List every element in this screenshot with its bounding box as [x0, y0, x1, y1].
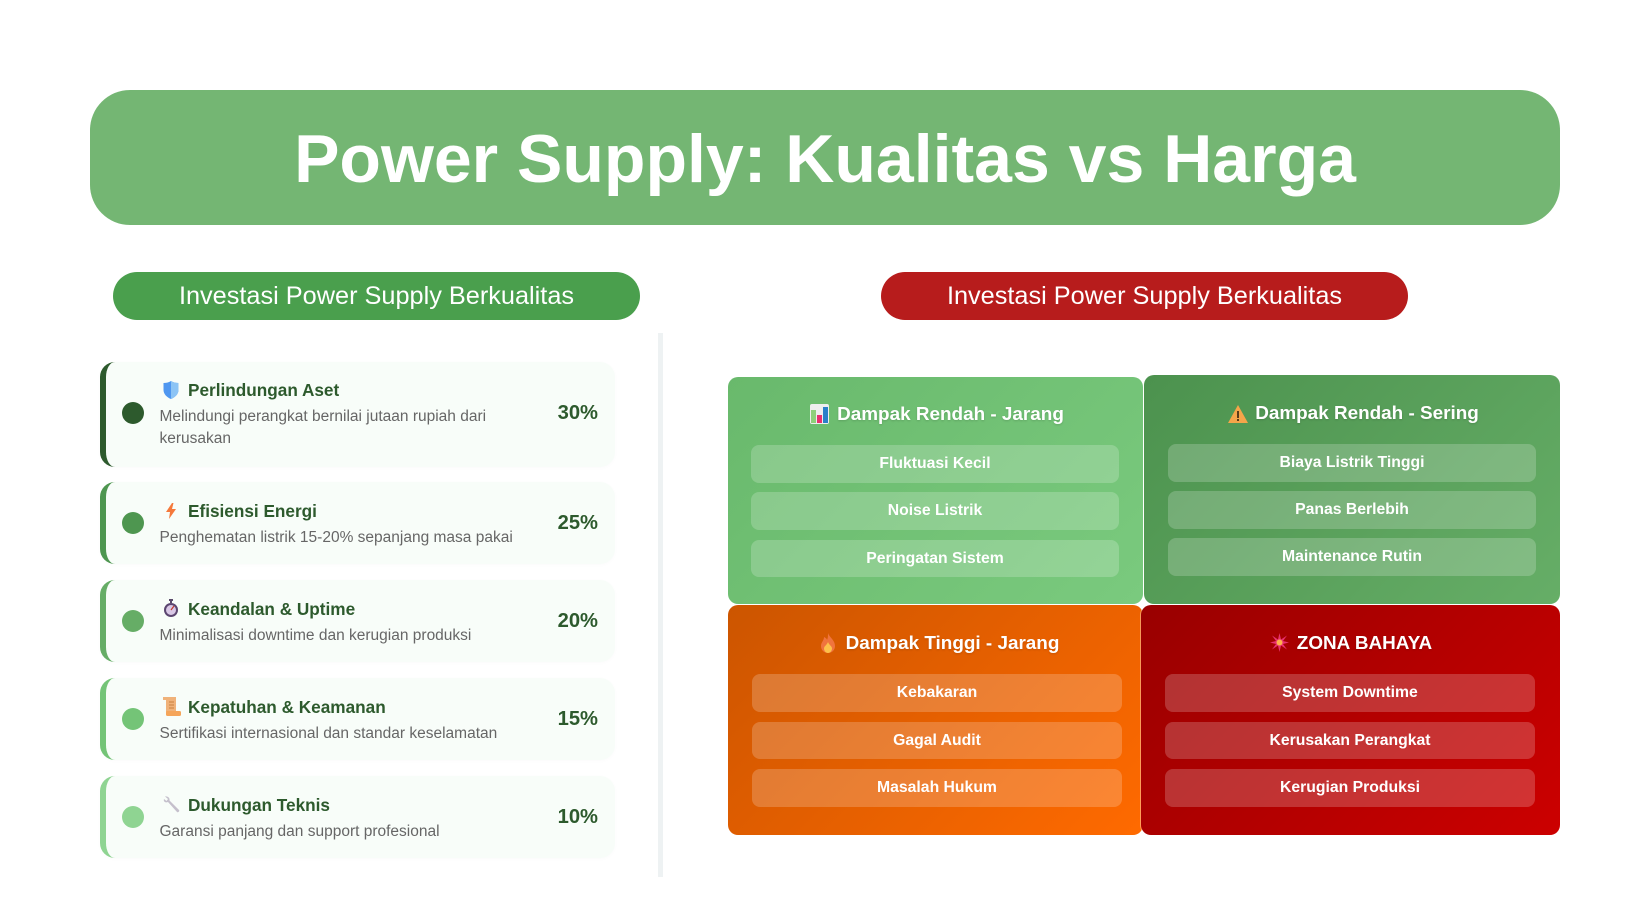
heading: Dampak Tinggi - Jarang — [846, 632, 1059, 654]
item: Gagal Audit — [893, 732, 981, 748]
panel: Dampak Rendah - Jarang — [728, 377, 1143, 604]
item — [1168, 538, 1536, 576]
right column heading — [881, 272, 1408, 320]
card: Kepatuhan & Keamanan: 15% — [558, 708, 598, 730]
item: Kerugian Produksi — [1280, 779, 1420, 796]
card: Dukungan Teknis: Dukungan Teknis — [188, 794, 330, 814]
panel: ZONA BAHAYA — [1141, 604, 1560, 835]
right column heading: Investasi Power Supply Berkualitas — [947, 282, 1342, 310]
icon: explosion — [1270, 633, 1289, 652]
title banner — [90, 90, 1560, 225]
card: Perlindungan Aset: kerusakan — [160, 430, 231, 446]
item: Masalah Hukum — [877, 779, 997, 796]
item: Peringatan Sistem — [866, 550, 1004, 566]
item — [1168, 491, 1536, 528]
heading: Dampak Rendah - Jarang — [837, 404, 1064, 425]
left column heading — [113, 272, 640, 320]
item: Kerusakan Perangkat — [1269, 732, 1431, 748]
card: Efisiensi Energi: Efisiensi Energi — [188, 500, 317, 520]
icon: fire — [821, 633, 835, 653]
heading: ZONA BAHAYA — [1297, 632, 1432, 654]
item — [1165, 674, 1535, 712]
title banner: Power Supply: Kualitas vs Harga — [294, 121, 1356, 197]
item — [751, 445, 1119, 482]
card: Perlindungan Aset: Perlindungan Aset — [188, 380, 339, 400]
card: Kepatuhan & Keamanan: Sertifikasi internasional dan standar keselamatan — [160, 725, 497, 742]
item — [1165, 769, 1535, 806]
item — [1165, 722, 1535, 759]
item — [752, 769, 1122, 806]
item: Biaya Listrik Tinggi — [1280, 454, 1424, 471]
item — [751, 492, 1119, 530]
card: Kepatuhan & Keamanan — [100, 678, 615, 760]
item: System Downtime — [1282, 684, 1418, 701]
item — [1168, 444, 1536, 482]
item: Panas Berlebih — [1295, 501, 1409, 518]
item — [751, 540, 1119, 577]
item — [752, 722, 1122, 759]
card: Efisiensi Energi — [100, 482, 615, 564]
card: Keandalan & Uptime: Minimalisasi downtime dan kerugian produksi — [160, 627, 471, 644]
item — [752, 674, 1122, 712]
icon: bar chart — [810, 404, 829, 424]
card: Dukungan Teknis: Garansi panjang dan support profesional — [160, 823, 440, 840]
panel: Dampak Rendah - Sering — [1144, 375, 1560, 604]
card: Dukungan Teknis: 10% — [558, 806, 598, 828]
panel: Dampak Tinggi - Jarang — [728, 604, 1143, 835]
card: Perlindungan Aset: Melindungi perangkat bernilai jutaan rupiah dari — [160, 408, 486, 425]
card: Efisiensi Energi: Penghematan listrik 15-20% sepanjang masa pakai — [160, 529, 513, 546]
card: Keandalan & Uptime — [100, 580, 615, 662]
card: Keandalan & Uptime: 20% — [558, 610, 598, 632]
card: Perlindungan Aset — [100, 362, 615, 467]
item: Fluktuasi Kecil — [879, 455, 991, 472]
item: Kebakaran — [897, 684, 977, 701]
card: Dukungan Teknis — [100, 776, 615, 858]
item: Noise Listrik — [888, 502, 982, 519]
item: Maintenance Rutin — [1282, 548, 1422, 565]
card: Perlindungan Aset: 30% — [558, 402, 598, 424]
left column heading: Investasi Power Supply Berkualitas — [179, 282, 574, 310]
card: Efisiensi Energi: 25% — [558, 512, 598, 534]
card: Keandalan & Uptime: Keandalan & Uptime — [188, 598, 355, 618]
panel: investment factor list — [100, 362, 598, 858]
heading: Dampak Rendah - Sering — [1255, 403, 1479, 424]
icon: warning — [1228, 405, 1248, 423]
card: Kepatuhan & Keamanan: Kepatuhan & Keamanan — [188, 696, 386, 716]
